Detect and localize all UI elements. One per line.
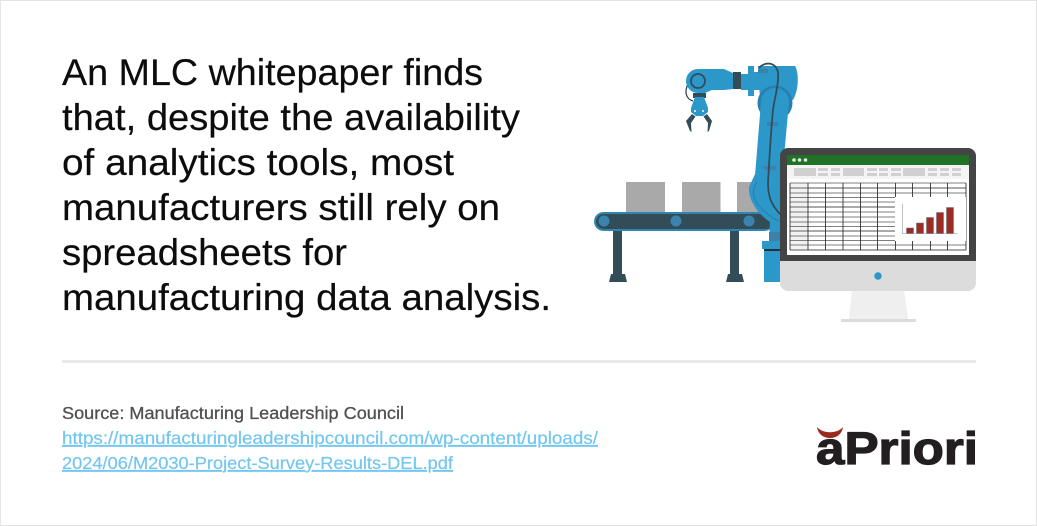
desktop monitor: [780, 148, 976, 322]
source citation: [62, 403, 598, 473]
source citation: https://manufacturingleadershipcouncil.com/wp-content/uploads/: [62, 428, 598, 448]
gripper: [686, 93, 712, 132]
spreadsheet screen: [787, 155, 969, 255]
bar chart: [895, 197, 966, 241]
forearm: [753, 88, 789, 200]
gripper cable: [686, 84, 693, 101]
monitor stand: [849, 290, 908, 319]
monitor body: [780, 258, 976, 291]
headline: manufacturing data analysis.: [62, 277, 551, 318]
head: [686, 69, 733, 93]
robot arm: [686, 64, 798, 282]
headline: that, despite the availability: [62, 97, 521, 138]
elbow joint: [749, 170, 781, 241]
headline: spreadsheets for: [62, 232, 347, 273]
logo: aPriori: aPriori: [816, 423, 978, 474]
conveyor belt: [594, 212, 774, 282]
boxes on conveyor: [626, 182, 777, 212]
divider: [62, 360, 976, 363]
source citation: 2024/06/M2030-Project-Survey-Results-DEL.pdf: [62, 453, 453, 473]
shoulder joint: [758, 86, 792, 120]
headline: of analytics tools, most: [62, 142, 455, 183]
headline: [62, 52, 551, 318]
headline: manufacturers still rely on: [62, 187, 500, 228]
cable and clips: [758, 69, 768, 73]
source citation: Source: Manufacturing Leadership Council: [62, 403, 404, 423]
illustration: factory robot and monitor: [594, 64, 976, 322]
wrist connector and flange: [741, 66, 760, 96]
upper arm housing: [758, 66, 798, 100]
headline: An MLC whitepaper finds: [62, 52, 483, 93]
